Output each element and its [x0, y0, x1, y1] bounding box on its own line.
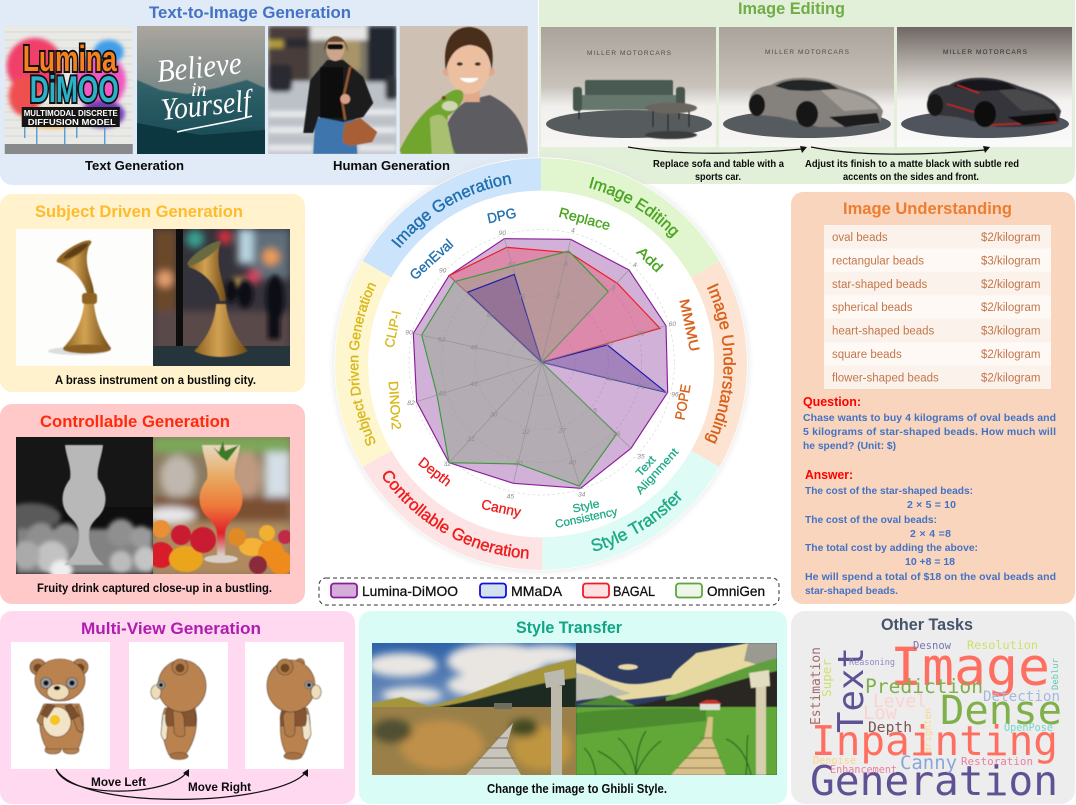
word cloud: Brighten — [923, 708, 934, 753]
arrow: sofa to car — [628, 146, 807, 153]
heading: text-to-image generation: Text-to-Image Generation — [149, 3, 351, 22]
word cloud: Text — [831, 647, 872, 733]
radar chart with category ring — [332, 152, 750, 573]
ring segment: controllable generation — [362, 450, 542, 570]
axis tick values: 30 — [606, 340, 613, 347]
caption: replace sofa: sports car. — [695, 171, 741, 183]
text block: answer: The cost of the oval beads: — [805, 514, 937, 526]
image: matte black sports car: MILLER MOTORCARS — [943, 49, 1028, 56]
text block: answer: star-shaped beads. — [805, 585, 898, 597]
axis labels: style transfer: Alignment — [634, 446, 682, 497]
table: bead prices: $2/kilogram — [981, 372, 1040, 384]
word cloud: Image — [890, 637, 1050, 698]
image: believe in yourself lettering: Yourself — [159, 82, 256, 127]
axis labels: controllable generation: Canny — [480, 496, 522, 520]
ring segment: image generation — [362, 158, 541, 278]
axis tick values: 40 — [569, 459, 576, 466]
image: silver sports car: MILLER MOTORCARS — [765, 49, 850, 56]
axis labels: controllable generation: Depth — [415, 454, 455, 489]
word cloud: Low — [863, 702, 898, 724]
legend item: OmniGen: OmniGen — [707, 583, 765, 599]
arrow: move left — [56, 769, 189, 791]
image: woman walking on street — [268, 26, 396, 154]
table: bead prices: oval beads — [832, 232, 888, 244]
axis tick values: 4 — [633, 262, 637, 269]
ring segment: image generation: Image Generation — [391, 175, 512, 248]
caption: text generation: Text Generation — [85, 158, 184, 173]
table: bead prices: $2/kilogram — [981, 302, 1040, 314]
axis tick values: 26 — [612, 431, 621, 438]
word cloud: Canny — [900, 752, 957, 774]
image: believe in yourself lettering: in — [191, 79, 207, 101]
word cloud: Denoise — [813, 755, 856, 767]
axis tick values: 3 — [564, 260, 568, 267]
axis labels: subject driven generation — [382, 309, 404, 430]
table: bead prices: square beads — [832, 349, 902, 361]
ring segment: controllable generation: Controllable Generation — [382, 470, 529, 559]
image: boy with iguana — [400, 26, 528, 154]
ring segment: image understanding: Image Understanding — [704, 283, 736, 444]
text block: question: Question: — [803, 395, 861, 409]
panel: image understanding — [791, 192, 1075, 604]
ring segment: subject driven generation — [335, 261, 391, 467]
axis tick values: 30 — [515, 461, 523, 468]
text block: answer: Answer: — [805, 468, 853, 482]
axis tick values: 82 — [407, 400, 415, 407]
word cloud: Estimation — [809, 647, 824, 725]
text block: answer: 2 × 4 =8 — [910, 528, 951, 540]
heading: multi-view generation: Multi-View Generation — [81, 620, 261, 638]
series: OmniGen — [422, 251, 617, 486]
word cloud: Dense — [940, 688, 1062, 734]
caption: replace sofa — [653, 158, 784, 183]
axis tick values: 27 — [558, 428, 566, 435]
caption: human generation: Human Generation — [333, 158, 450, 173]
text block: answer: The cost of the star-shaped beads: — [805, 485, 973, 497]
caption: adjust finish — [805, 158, 1019, 183]
image: cocktail with fruit — [153, 437, 290, 574]
axis labels: image generation: DPG — [486, 205, 518, 226]
axis labels: subject driven generation: CLIP-I — [382, 309, 404, 349]
label: move right: Move Right — [188, 780, 251, 794]
text block: answer: He will spend a total of $18 on the oval beads and — [805, 571, 1056, 583]
text block: question — [803, 395, 1056, 452]
table: bead prices: rectangular beads — [832, 255, 924, 267]
axis tick values: 2 — [555, 292, 560, 299]
axis tick values: 45 — [470, 345, 478, 352]
image: graffiti Lumina DiMOO: DIFFUSION MODEL — [28, 118, 116, 127]
axis tick values: 90 — [499, 230, 506, 237]
axis labels: image editing: Replace — [557, 204, 612, 233]
ring segment: image editing: Image Editing — [589, 176, 679, 238]
word cloud: Generation — [810, 757, 1058, 805]
ring segment: image understanding — [691, 261, 747, 467]
axis tick values: 30 — [490, 412, 498, 419]
axis tick values: 48 — [606, 376, 613, 383]
word cloud: Resolution — [967, 638, 1038, 652]
series: BAGAL — [449, 247, 660, 362]
axis labels: image understanding: MMMU — [676, 297, 703, 353]
axis labels: image editing — [557, 204, 666, 275]
axis labels: subject driven generation: DINOv2 — [386, 380, 404, 430]
axis tick values: 41 — [470, 381, 478, 388]
table: bead prices: spherical beads — [832, 302, 913, 314]
panel: image editing — [539, 0, 1075, 184]
axis labels: image generation: GenEval — [406, 236, 456, 283]
word cloud — [809, 637, 1062, 805]
series: MMaDA — [467, 274, 666, 392]
text block: answer: 10 +8 = 18 — [905, 556, 955, 568]
axis tick values: 31 — [467, 436, 475, 443]
word cloud: Prediction — [865, 675, 983, 698]
panel: style transfer — [359, 611, 787, 804]
axis tick values: 61 — [439, 391, 447, 398]
label: move left: Move Left — [91, 775, 146, 789]
table: bead prices: $2/kilogram — [981, 349, 1040, 361]
axis tick values: 45 — [637, 330, 645, 337]
image: sofa and table in showroom: MILLER MOTORCARS — [587, 50, 672, 57]
image: brass instrument on white — [16, 229, 153, 366]
table: bead prices: $3/kilogram — [981, 255, 1040, 267]
caption: adjust finish: Adjust its finish to a matte black with subtle red — [805, 158, 1019, 170]
image: bear front view — [11, 642, 110, 769]
legend item: OmniGen — [676, 583, 765, 599]
word cloud: Deblur — [1051, 658, 1061, 690]
panel: controllable generation — [0, 404, 305, 604]
axis tick values: 72 — [638, 384, 645, 391]
word cloud: Detection — [983, 689, 1060, 705]
axis labels: image generation — [406, 205, 518, 283]
word cloud: OpenPose — [1004, 723, 1053, 734]
axis tick values: 32 — [444, 461, 451, 468]
image: believe in yourself lettering — [137, 26, 265, 154]
axis tick values: 96 — [671, 392, 679, 399]
panel: other tasks word cloud — [791, 611, 1075, 805]
axis tick values: 90 — [439, 268, 447, 275]
heading: image understanding: Image Understanding — [843, 199, 1012, 218]
axis tick values: 90 — [405, 329, 413, 336]
legend item: BAGAL: BAGAL — [613, 583, 655, 599]
ring segment: image editing — [541, 158, 720, 278]
word cloud: Depth — [868, 719, 912, 736]
caption: fruity drink: Fruity drink captured close-up in a bustling. — [37, 581, 272, 595]
legend item: Lumina-DiMOO: Lumina-DiMOO — [362, 583, 458, 599]
arrow: car to matte black car — [811, 146, 990, 154]
axis tick values: 34 — [578, 492, 586, 499]
legend item: MMaDA — [480, 583, 563, 599]
image: graffiti Lumina DiMOO — [4, 26, 133, 154]
text block: question: Chase wants to buy 4 kilograms of oval beads and — [803, 412, 1056, 424]
heading: controllable generation: Controllable Generation — [40, 413, 230, 431]
text block: answer: 2 × 5 = 10 — [907, 499, 956, 511]
image: graffiti Lumina DiMOO: MULTIMODAL DISCRETE — [24, 109, 118, 118]
panel: text-to-image generation — [0, 0, 538, 185]
caption: replace sofa: Replace sofa and table with a — [653, 158, 784, 170]
axis tick values: 35 — [637, 453, 645, 460]
axis labels: style transfer: Style — [571, 498, 601, 516]
axis tick values: 3 — [611, 286, 615, 293]
axis labels: controllable generation — [415, 454, 522, 520]
image: bear right view — [245, 642, 344, 769]
text block: answer — [805, 468, 1056, 597]
image: brass instrument on city street — [153, 229, 290, 366]
caption: brass instrument: A brass instrument on a bustling city. — [55, 373, 256, 387]
caption: ghibli style: Change the image to Ghibli Style. — [487, 782, 667, 796]
axis tick values: 60 — [487, 312, 495, 319]
caption: adjust finish: accents on the sides and front. — [843, 171, 979, 183]
axis tick values: 67 — [508, 262, 516, 269]
image: ghibli style landscape — [576, 643, 777, 775]
axis tick values: 4 — [571, 228, 575, 235]
image: depth map — [16, 437, 153, 574]
axis tick values: 62 — [438, 337, 446, 344]
word cloud: Level — [873, 691, 927, 712]
axis labels: style transfer: Text — [634, 453, 659, 479]
image: sofa and table in showroom — [541, 27, 716, 147]
axis tick values: 45 — [518, 294, 526, 301]
ring segment: subject driven generation: Subject Driven Generation — [348, 282, 376, 446]
heading: style transfer: Style Transfer — [516, 619, 623, 637]
legend item: MMaDA: MMaDA — [511, 583, 563, 599]
axis tick values — [405, 228, 679, 501]
image: photo landscape — [372, 643, 576, 775]
series: Lumina-DiMOO — [413, 239, 668, 488]
table: bead prices — [824, 225, 1051, 389]
axis tick values: 5 — [593, 408, 597, 415]
word cloud: Super — [819, 659, 834, 697]
panel: subject driven generation — [0, 194, 305, 392]
axis labels: image understanding: POPE — [672, 383, 694, 421]
word cloud: Reasoning — [849, 658, 895, 668]
heading: other tasks: Other Tasks — [881, 616, 973, 634]
image: matte black sports car — [897, 27, 1072, 147]
table: bead prices: flower-shaped beads — [832, 372, 939, 384]
axis labels: style transfer: Consistency — [554, 506, 619, 531]
legend item: BAGAL — [583, 583, 655, 599]
axis labels: style transfer — [554, 446, 682, 531]
ring segment: style transfer: Style Transfer — [591, 490, 682, 551]
axis labels: image editing: Add — [634, 243, 666, 275]
legend — [319, 578, 779, 605]
text block: question: he spend? (Unit: $) — [803, 440, 896, 452]
arrow: move right — [56, 769, 308, 799]
word cloud: Enhancement — [830, 765, 897, 776]
table: bead prices: $2/kilogram — [981, 232, 1040, 244]
text block: answer: The total cost by adding the above: — [805, 542, 978, 554]
image: bear left view — [129, 642, 228, 769]
word cloud: Inpainting — [811, 717, 1058, 765]
heading: subject driven generation: Subject Driven Generation — [35, 203, 243, 221]
table: bead prices: heart-shaped beads — [832, 326, 935, 338]
text block: question: 5 kilograms of star-shaped beads. How much will — [803, 426, 1056, 438]
image: believe in yourself lettering: Believe — [155, 44, 243, 89]
axis tick values: 60 — [669, 321, 676, 328]
word cloud: Restoration — [961, 755, 1033, 768]
table: bead prices: star-shaped beads — [832, 279, 928, 291]
table: bead prices: $3/kilogram — [981, 326, 1040, 338]
panel: multi-view generation — [0, 611, 355, 804]
table: bead prices: $2/kilogram — [981, 279, 1040, 291]
axis tick values: 45 — [507, 494, 514, 501]
axis labels: image understanding — [672, 297, 703, 421]
image: silver sports car — [719, 27, 894, 147]
ring segment: style transfer — [542, 450, 720, 570]
word cloud: Desnow — [913, 640, 952, 652]
axis tick values: 22 — [521, 429, 530, 436]
